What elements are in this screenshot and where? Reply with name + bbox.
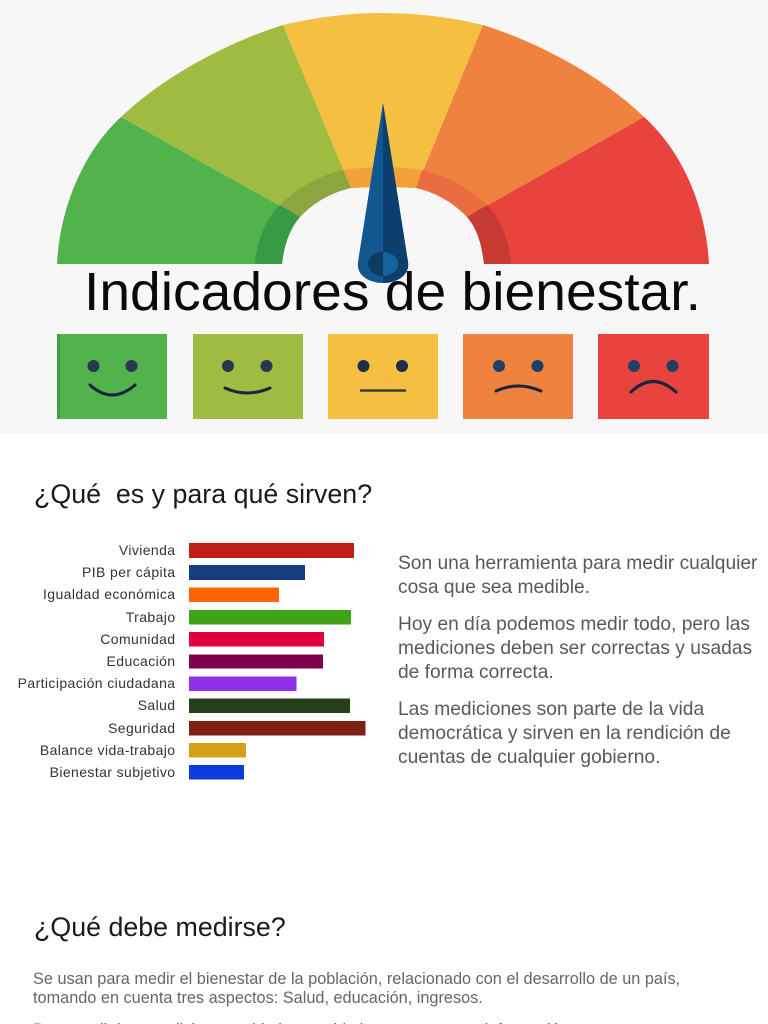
bar chart: indicators: Comunidad [100, 631, 176, 647]
text block: measurement: Se usan para medir el bienestar de la población, relacionado con el desarrollo de un país, [33, 970, 680, 988]
bar chart: indicators [18, 542, 366, 780]
icon: neutral face [328, 334, 438, 419]
heading: what are they: ¿Qué es y para qué sirven? [34, 479, 372, 509]
bar chart: indicators: Balance vida-trabajo [40, 742, 176, 758]
text block: purpose: Hoy en día podemos medir todo, pero las [398, 614, 750, 635]
icon: very happy face [57, 334, 167, 419]
header panel: gauge and title [57, 13, 709, 419]
text block: purpose: democrática y sirven en la rendición de [398, 723, 731, 744]
text block: measurement [33, 970, 680, 1024]
icon: happy face [193, 334, 303, 419]
text block: purpose [398, 553, 758, 768]
title: Indicadores de bienestar. [84, 262, 701, 322]
icon: sad face [463, 334, 573, 419]
text block: purpose: mediciones deben ser correctas y usadas [398, 638, 752, 659]
bar chart: indicators: Vivienda [119, 542, 176, 558]
bar chart: indicators: Salud [138, 697, 176, 713]
bar chart: indicators: PIB per cápita [82, 564, 176, 580]
text block: purpose: Son una herramienta para medir cualquier [398, 553, 757, 574]
text block: purpose: Las mediciones son parte de la vida [398, 699, 704, 720]
icon: very sad face [598, 334, 709, 419]
text block: measurement: tomando en cuenta tres aspectos: Salud, educación, ingresos. [33, 988, 483, 1006]
text block: purpose: cuentas de cualquier gobierno. [398, 747, 660, 768]
bar chart: indicators: Trabajo [126, 609, 176, 625]
text block: purpose: cosa que sea medible. [398, 577, 590, 598]
bar chart: indicators: Igualdad económica [43, 586, 176, 602]
heading: what should be measured: ¿Qué debe medirse? [34, 912, 286, 942]
text block: purpose: de forma correcta. [398, 662, 554, 683]
icon: gauge dial [57, 13, 709, 264]
bar chart: indicators: Educación [107, 653, 176, 669]
bar chart: indicators: Bienestar subjetivo [50, 764, 176, 780]
bar chart: indicators: Participación ciudadana [18, 675, 176, 691]
icon: gauge needle [358, 103, 408, 283]
bar chart: indicators: Seguridad [108, 720, 176, 736]
